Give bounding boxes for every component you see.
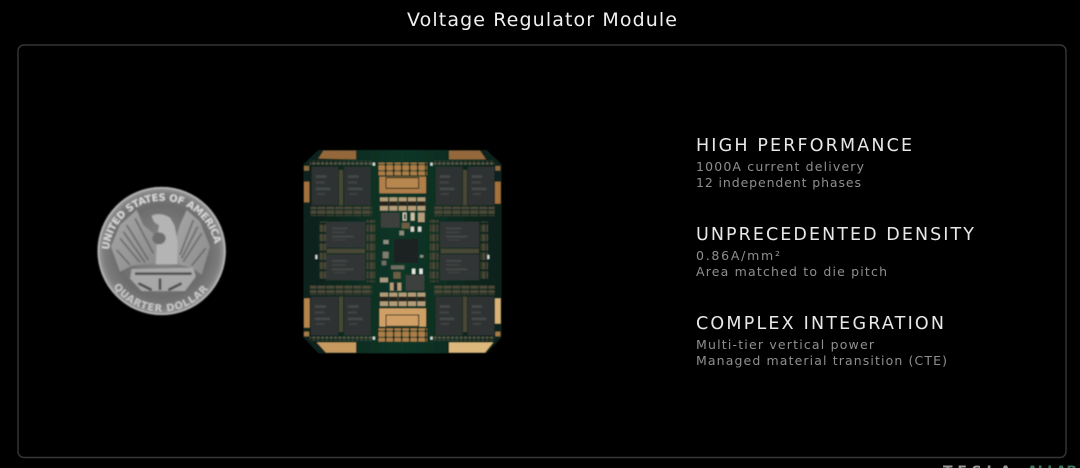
bottom center capacitor row (380, 293, 425, 306)
eagle shading (152, 232, 166, 244)
corner gold pads (304, 151, 501, 353)
eagle right wing (177, 210, 210, 275)
bottom-right power stage (433, 286, 495, 341)
wing feathers (117, 218, 206, 266)
detail line 2: Managed material transition (CTE) (696, 353, 947, 368)
top center copper terminal (378, 163, 427, 193)
bottom-left power stage (310, 286, 372, 341)
heading: UNPRECEDENTED DENSITY (696, 225, 974, 245)
white alignment marks (315, 163, 489, 340)
heading: HIGH PERFORMANCE (696, 136, 912, 156)
coin disc (98, 187, 226, 315)
legend text bottom: QUARTER DOLLAR (114, 283, 208, 312)
eagle left wing (111, 210, 157, 272)
legend path bottom (113, 287, 210, 312)
text block: complex integration (696, 314, 947, 368)
top-left power stage (310, 161, 372, 216)
middle-right power stage (430, 220, 488, 282)
arrows and branch (130, 268, 196, 291)
coin legend (109, 201, 215, 250)
icon: quarter coin (96, 186, 227, 316)
footer logo, clipped by slide edge (943, 464, 1077, 468)
text block: unprecedented density (696, 225, 974, 279)
bottom center copper terminal (378, 308, 427, 342)
board substrate (303, 150, 502, 353)
eagle body and head (152, 214, 178, 264)
detail line 1: 0.86A/mm² (696, 248, 780, 263)
detail line 2: Area matched to die pitch (696, 264, 887, 279)
middle-left power stage (319, 220, 375, 282)
top center capacitor row (380, 197, 425, 211)
detail line 1: Multi-tier vertical power (696, 337, 875, 352)
coin rim (98, 188, 225, 314)
detail line 1: 1000A current delivery (696, 159, 865, 174)
detail line 2: 12 independent phases (696, 175, 861, 190)
chip: voltage regulator board (303, 150, 502, 353)
legend text top: UNITED STATES OF AMERICA (101, 192, 222, 250)
title: Voltage Regulator Module (407, 9, 677, 31)
text block: high performance (696, 136, 912, 190)
branch detail (135, 274, 192, 290)
center controller and small ICs (380, 213, 425, 291)
top-right power stage (434, 161, 495, 216)
heading: COMPLEX INTEGRATION (696, 314, 944, 334)
